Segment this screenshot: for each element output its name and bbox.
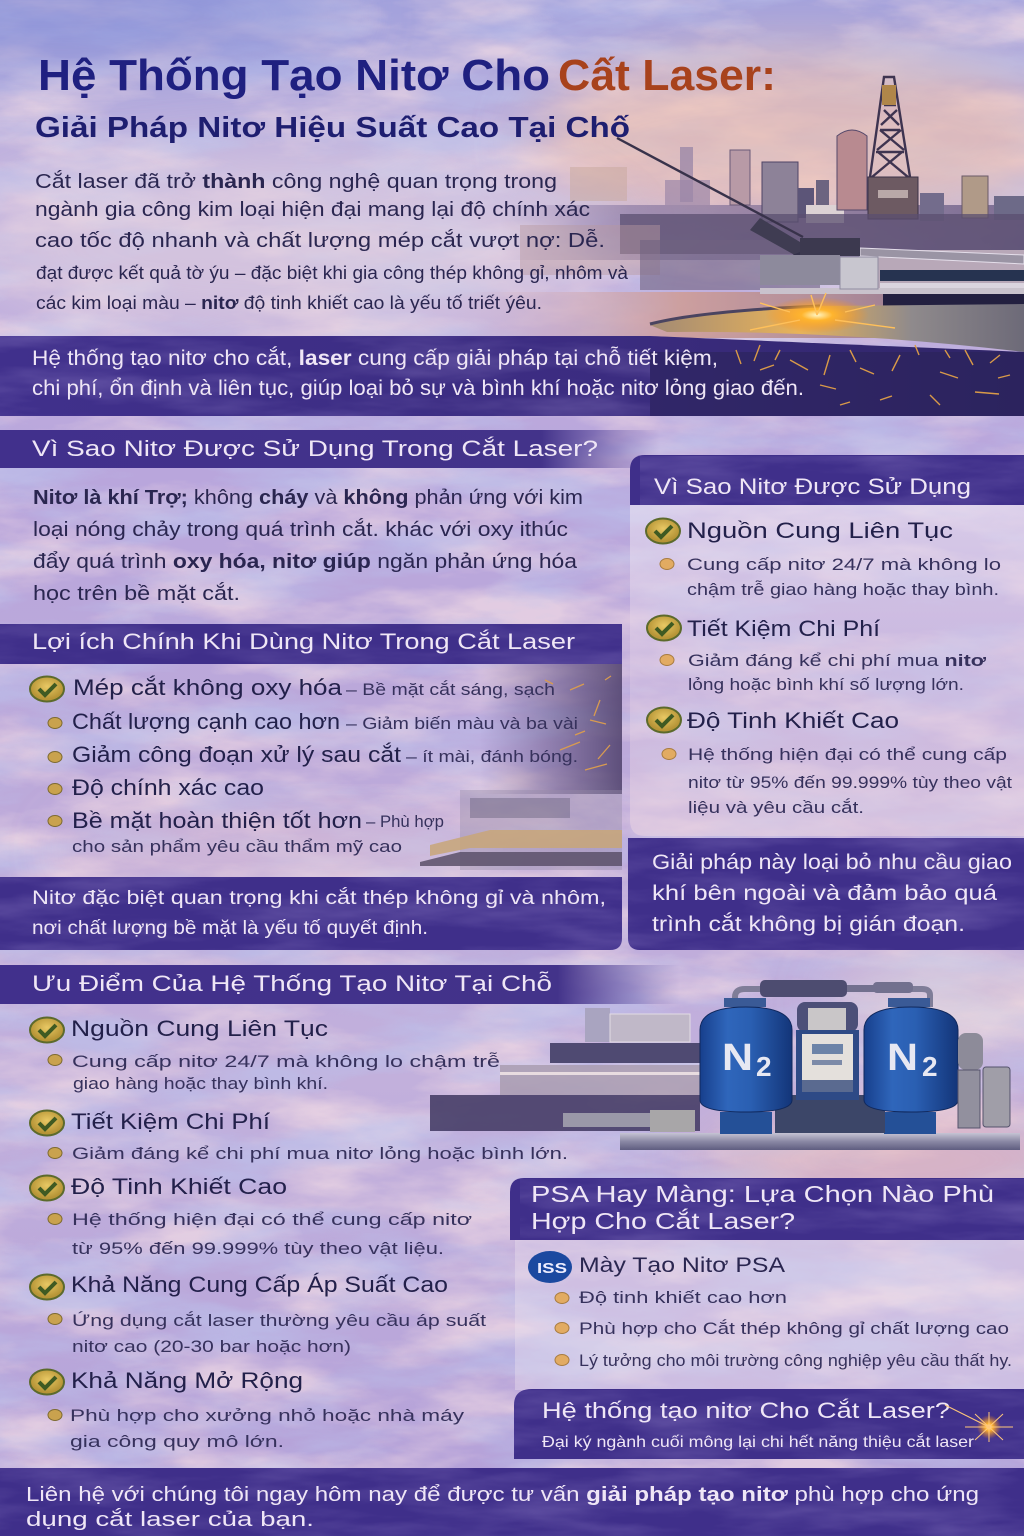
banner: on-site nitrogen summary: chi phí, ổn định và liên tục, giúp loại bỏ sự và bình khí hoặc nitơ lỏng giao đến. xyxy=(32,377,804,400)
panel: right column benefits: nitơ từ 95% đến 99.999% tùy theo vật xyxy=(688,773,1012,792)
on-site advantages list: Nguồn Cung Liên Tục xyxy=(71,1016,328,1041)
benefits list: Mép cắt không oxy hóa xyxy=(73,675,343,700)
intro paragraph: cao tốc độ nhanh và chất lượng mép cắt vượt nợ: Dễ. xyxy=(35,229,605,252)
panel: PSA or membrane: Phù hợp cho Cắt thép không gỉ chất lượng cao xyxy=(579,1319,1009,1338)
benefits list: Chất lượng cạnh cao hơn xyxy=(72,709,340,734)
on-site advantages list: Giảm đáng kể chi phí mua nitơ lỏng hoặc bình lớn. xyxy=(72,1144,568,1163)
panel: right column benefits: Tiết Kiệm Chi Phí xyxy=(687,616,880,641)
on-site advantages list: Khả Năng Cung Cấp Áp Suất Cao xyxy=(71,1272,448,1297)
callout: stainless and aluminium: Nitơ đặc biệt quan trọng khi cắt thép không gỉ và nhôm, xyxy=(32,887,606,909)
callout: no external supply: trình cắt không bị gián đoạn. xyxy=(652,913,965,936)
title: Cất Laser: xyxy=(558,51,776,100)
title: Hệ Thống Tạo Nitơ Cho xyxy=(38,51,550,100)
section heading: key benefits: Lợi ích Chính Khi Dùng Nitơ Trong Cắt Laser xyxy=(32,629,575,654)
tank right: N xyxy=(887,1037,918,1079)
panel: right column benefits: Giảm đáng kể chi phí mua nitơ xyxy=(688,651,987,670)
text block: why nitrogen explanation: học trên bề mặt cắt. xyxy=(33,582,240,605)
benefits list: cho sản phẩm yêu cầu thẩm mỹ cao xyxy=(72,837,402,856)
panel: PSA or membrane: Hợp Cho Cắt Laser? xyxy=(531,1208,795,1234)
on-site advantages list: từ 95% đến 99.999% tùy theo vật liệu. xyxy=(72,1239,444,1258)
footer call to action: Liên hệ với chúng tôi ngay hôm nay để được tư vấn giải pháp tạo nitơ phù hợp cho ứng xyxy=(26,1484,979,1506)
on-site advantages list: Cung cấp nitơ 24/7 mà không lo chậm trễ xyxy=(72,1052,500,1071)
callout: stainless and aluminium xyxy=(0,877,622,950)
tank left: N xyxy=(722,1037,753,1079)
hero illustration: refinery skyline and laser cutter xyxy=(450,77,1024,352)
intro paragraph: Cắt laser đã trở thành công nghệ quan trọng trong xyxy=(35,170,557,193)
callout: laser nitrogen systems: Hệ thống tạo nitơ Cho Cắt Laser? xyxy=(542,1398,950,1423)
control unit xyxy=(796,1002,859,1100)
text block: why nitrogen explanation: loại nóng chảy trong quá trình cắt. khác với oxy ithúc xyxy=(33,518,568,541)
section heading: key benefits xyxy=(0,624,622,664)
tank left: 2 xyxy=(756,1051,772,1082)
section heading: why nitrogen xyxy=(0,430,660,468)
panel: PSA or membrane: Mày Tạo Nitơ PSA xyxy=(579,1254,785,1277)
tank left xyxy=(700,1007,792,1112)
benefits list: – Giảm biến màu và ba vài xyxy=(346,714,578,733)
on-site advantages list: Khả Năng Mở Rộng xyxy=(71,1368,303,1393)
on-site advantages list xyxy=(30,1016,568,1451)
text block: why nitrogen explanation xyxy=(33,487,583,605)
panel: right column benefits xyxy=(630,455,1024,836)
text block: why nitrogen explanation: đẩy quá trình oxy hóa, nitơ giúp ngăn phản ứng hóa xyxy=(33,551,578,573)
benefits list xyxy=(30,675,578,856)
panel: right column benefits: liệu và yêu cầu cắt. xyxy=(688,798,864,817)
panel: right column benefits: chậm trễ giao hàng hoặc thay bình. xyxy=(687,580,999,599)
banner: on-site nitrogen summary xyxy=(0,336,1024,416)
on-site advantages list: nitơ cao (20-30 bar hoặc hơn) xyxy=(72,1337,351,1356)
callout: laser nitrogen systems: Đại ký ngành cuối mông lại chi hết năng thiệu cắt laser xyxy=(542,1432,975,1451)
callout: no external supply xyxy=(628,838,1024,950)
panel: PSA or membrane: Lý tưởng cho môi trường công nghiệp yêu cầu thất hy. xyxy=(579,1351,1012,1370)
benefits list: – Phù hợp xyxy=(366,812,444,831)
callout: no external supply: Giải pháp này loại bỏ nhu cầu giao xyxy=(652,851,1012,874)
on-site advantages list: Hệ thống hiện đại có thể cung cấp nitơ xyxy=(72,1210,472,1229)
panel: right column benefits: Hệ thống hiện đại có thể cung cấp xyxy=(688,745,1007,764)
title xyxy=(38,51,776,100)
benefits list: Bề mặt hoàn thiện tốt hơn xyxy=(72,808,362,833)
benefits list: – Bề mặt cắt sáng, sạch xyxy=(346,680,555,699)
on-site advantages list: Độ Tinh Khiết Cao xyxy=(71,1174,287,1199)
section heading: why nitrogen: Vì Sao Nitơ Được Sử Dụng Trong Cắt Laser? xyxy=(32,436,598,461)
icon: PSA badge xyxy=(528,1251,572,1283)
on-site advantages list: Ứng dụng cắt laser thường yêu cầu áp suất xyxy=(72,1311,486,1330)
panel heading: Vì Sao Nitơ Được Sử Dụng xyxy=(654,474,971,499)
panel: right column benefits: Cung cấp nitơ 24/7 mà không lo xyxy=(687,555,1001,574)
section heading: on-site advantages: Ưu Điểm Của Hệ Thống Tạo Nitơ Tại Chỗ xyxy=(32,971,552,996)
panel: PSA or membrane: Độ tinh khiết cao hơn xyxy=(579,1288,787,1307)
icon: laser spark xyxy=(945,1405,1013,1442)
illustration: N2 generator xyxy=(430,980,1020,1150)
footer call to action: dụng cắt laser của bạn. xyxy=(26,1508,314,1531)
text block: why nitrogen explanation: Nitơ là khí Trợ; không cháy và không phản ứng với kim xyxy=(33,487,583,509)
benefits list: – ít mài, đánh bóng. xyxy=(406,747,578,766)
on-site advantages list: gia công quy mô lớn. xyxy=(70,1432,284,1451)
on-site advantages list: Phù hợp cho xưởng nhỏ hoặc nhà máy xyxy=(70,1406,465,1425)
intro paragraph: đạt được kết quả tờ ýu – đặc biệt khi gia công thép không gỉ, nhôm và xyxy=(36,263,629,283)
intro paragraph xyxy=(35,170,629,313)
tank right: 2 xyxy=(922,1051,938,1082)
banner: on-site nitrogen summary: Hệ thống tạo nitơ cho cắt, laser cung cấp giải pháp tại chỗ tiết kiệm, xyxy=(32,347,718,370)
section heading: on-site advantages xyxy=(0,965,680,1004)
subtitle: Giải Pháp Nitơ Hiệu Suất Cao Tại Chố xyxy=(35,112,630,144)
panel: PSA or membrane xyxy=(510,1178,1024,1390)
intro paragraph: các kim loại màu – nitơ độ tinh khiết cao là yếu tố triết ýêu. xyxy=(36,293,542,313)
panel heading: PSA Hay Màng: Lựa Chọn Nào Phù xyxy=(531,1181,994,1207)
illustration: metal sheets and sparks xyxy=(420,664,622,870)
icon: PSA badge: ISS xyxy=(537,1260,567,1277)
benefits list: Độ chính xác cao xyxy=(72,775,264,800)
on-site advantages list: Tiết Kiệm Chi Phí xyxy=(71,1109,270,1134)
on-site advantages list: giao hàng hoặc thay bình khí. xyxy=(73,1074,328,1093)
callout: stainless and aluminium: nơi chất lượng bề mặt là yếu tố quyết định. xyxy=(32,918,428,939)
panel: right column benefits: lỏng hoặc bình khí số lượng lớn. xyxy=(688,675,964,694)
tank right xyxy=(864,1007,958,1112)
callout: no external supply: khí bên ngoài và đảm bảo quá xyxy=(652,882,997,905)
panel: right column benefits: Nguồn Cung Liên Tục xyxy=(687,518,953,543)
footer call to action xyxy=(0,1468,1024,1536)
icon: check xyxy=(646,518,680,544)
icon: check xyxy=(30,1018,64,1042)
benefits list: Giảm công đoạn xử lý sau cắt xyxy=(72,742,401,767)
icon: check xyxy=(30,676,64,702)
callout: laser nitrogen systems xyxy=(514,1389,1024,1459)
intro paragraph: ngành gia công kim loại hiện đại mang lại độ chính xác xyxy=(35,199,590,221)
panel: right column benefits: Độ Tinh Khiết Cao xyxy=(687,708,899,733)
